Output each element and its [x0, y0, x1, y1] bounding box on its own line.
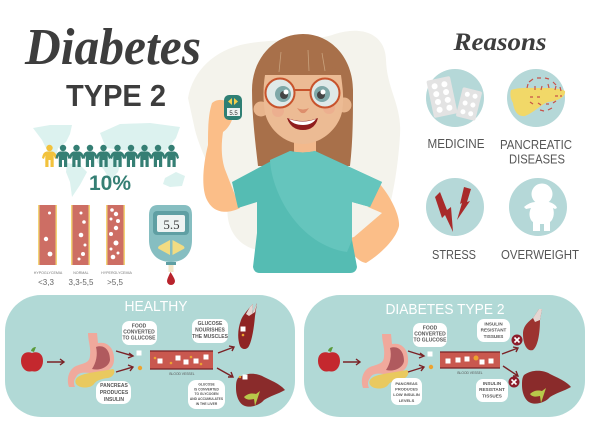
- callout: food converted: TO GLUCOSE: [123, 336, 156, 342]
- reason icon: pancreatic diseases: [507, 69, 565, 127]
- callout: insulin resistant muscles: [477, 319, 510, 342]
- callout: glucose to glycogen: GLUCOSE: [198, 382, 215, 386]
- callout: insulin resistant liver: RESISTANT: [479, 387, 505, 392]
- panel heading: diabetes type 2: DIABETES TYPE 2: [386, 301, 504, 318]
- callout: insulin resistant liver: TISSUES: [482, 394, 502, 398]
- blood vessel: [440, 352, 500, 368]
- icon: blocked muscle: [512, 334, 522, 346]
- mouth: [287, 118, 318, 130]
- meter in hand: 5.5: [229, 111, 238, 117]
- vessel labels: 3,3-5,5: [69, 278, 94, 287]
- icon: muscle: [238, 303, 257, 349]
- statistic: 10 percent: 10%: [89, 172, 131, 195]
- arrows: vessel to organs: [502, 347, 518, 376]
- label: stress: STRESS: [432, 247, 476, 262]
- vessel labels: HYPERGLYCEMIA: [101, 271, 132, 275]
- glucose meter: [149, 205, 192, 285]
- callout: pancreas produces insulin: INSULIN: [104, 397, 124, 403]
- callout: food converted: FOOD: [132, 324, 147, 330]
- glucose meter: 5.5: [163, 217, 180, 232]
- callout: pancreas low insulin: [391, 378, 422, 405]
- icon: liver: [522, 371, 571, 404]
- vessel labels: <3,3: [38, 278, 54, 287]
- reason icon: medicine: [426, 69, 484, 127]
- vessel labels: HYPOGLYCEMIA: [34, 271, 63, 275]
- vessel: normal: [71, 205, 90, 265]
- label: blood vessel: BLOOD VESSEL: [169, 372, 195, 376]
- hair: [252, 34, 353, 166]
- icon: apple: [21, 347, 43, 372]
- neck: [294, 138, 316, 155]
- arrows: stomach to glucose: [116, 351, 133, 372]
- icon: stomach and pancreas: [68, 333, 114, 388]
- callout: pancreas produces insulin: [96, 381, 131, 404]
- callout: food converted: CONVERTED: [414, 332, 446, 338]
- label: pancreatic diseases: [500, 137, 572, 166]
- face: [264, 75, 343, 144]
- callout: insulin resistant liver: INSULIN: [483, 381, 502, 386]
- callout: food converted: FOOD: [423, 326, 438, 332]
- callout: food converted: [413, 323, 447, 347]
- heading: Reasons: Reasons: [452, 29, 546, 56]
- background blob: [188, 31, 400, 250]
- callout: glucose nourishes muscles: GLUCOSE: [198, 321, 223, 327]
- glucose and insulin: [136, 350, 142, 370]
- vessel: hyperglycemia: [106, 205, 125, 265]
- label: blood vessel: BLOOD VESSEL: [457, 371, 483, 375]
- icon: liver: [236, 374, 285, 407]
- callout: glucose to glycogen: IN THE LIVER: [196, 402, 218, 406]
- callout: food converted: TO GLUCOSE: [414, 338, 447, 344]
- arrow: apple to stomach: [343, 359, 360, 365]
- callout: glucose to glycogen: IS CONVERTED: [194, 388, 219, 392]
- blood vessel: [150, 351, 213, 369]
- left arm: [203, 100, 240, 212]
- callout: pancreas produces insulin: PRODUCES: [100, 390, 129, 396]
- callout: glucose nourishes muscles: THE MUSCLES: [192, 334, 229, 340]
- callout: glucose nourishes muscles: [192, 319, 229, 343]
- vessel labels: >5,5: [107, 278, 123, 287]
- callout: food converted: [122, 321, 157, 345]
- heading: Type 2: TYPE 2: [66, 78, 166, 113]
- callout: pancreas low insulin: LEVELS: [399, 398, 415, 403]
- label: overweight: OVERWEIGHT: [501, 247, 579, 262]
- right arm: [347, 182, 399, 263]
- title: Diabetes: Diabetes: [24, 19, 201, 76]
- label: pancreatic diseases: DISEASES: [509, 152, 565, 166]
- callout: pancreas low insulin: PRODUCES: [395, 386, 418, 392]
- world map: [33, 123, 185, 197]
- panel: diabetes type 2: [304, 295, 585, 417]
- glasses and eyes: [266, 78, 340, 108]
- label: pancreatic diseases: PANCREATIC: [500, 137, 572, 152]
- meter in hand: [224, 95, 242, 120]
- ears: [254, 102, 268, 116]
- vessel labels: [34, 271, 132, 287]
- callout: glucose to glycogen: TO GLYCOGEN: [194, 392, 219, 396]
- arrows: vessel to organs: [217, 346, 234, 377]
- glucose and insulin: [428, 352, 433, 369]
- icon: muscle: [523, 309, 542, 350]
- callout: insulin resistant muscles: RESISTANT: [481, 328, 507, 332]
- callout: glucose to glycogen: AND ACCUMULATES: [190, 397, 224, 401]
- t-shirt: [232, 151, 382, 273]
- arrow: apple to stomach: [47, 359, 64, 365]
- panel: healthy: [5, 295, 295, 417]
- panel heading: healthy: HEALTHY: [124, 299, 188, 315]
- icon: blocked liver: [508, 376, 520, 388]
- vessel labels: NORMAL: [73, 271, 89, 275]
- vessel: hypoglycemia: [38, 205, 57, 265]
- icon: stomach and pancreas: [362, 334, 408, 388]
- arrows: stomach to glucose: [408, 351, 424, 372]
- callout: glucose to glycogen: [188, 380, 225, 409]
- callout: insulin resistant muscles: TISSUES: [484, 334, 503, 339]
- nose: [297, 108, 309, 113]
- callout: pancreas low insulin: PANCREAS: [395, 381, 418, 386]
- reason icon: stress: [426, 178, 484, 236]
- callout: pancreas produces insulin: PANCREAS: [100, 383, 129, 389]
- callout: food converted: CONVERTED: [123, 330, 155, 336]
- bangs: [265, 64, 341, 74]
- icon: apple: [318, 347, 340, 372]
- character: girl with glucose meter: [203, 34, 399, 273]
- callout: glucose nourishes muscles: NOURISHES: [195, 328, 226, 334]
- callout: pancreas low insulin: LOW INSULIN: [393, 392, 420, 397]
- callout: insulin resistant liver: [476, 379, 508, 402]
- label: medicine: MEDICINE: [428, 136, 485, 151]
- callout: insulin resistant muscles: INSULIN: [484, 322, 503, 326]
- statistic: people row: [42, 145, 179, 167]
- reason icon: overweight: [509, 178, 567, 236]
